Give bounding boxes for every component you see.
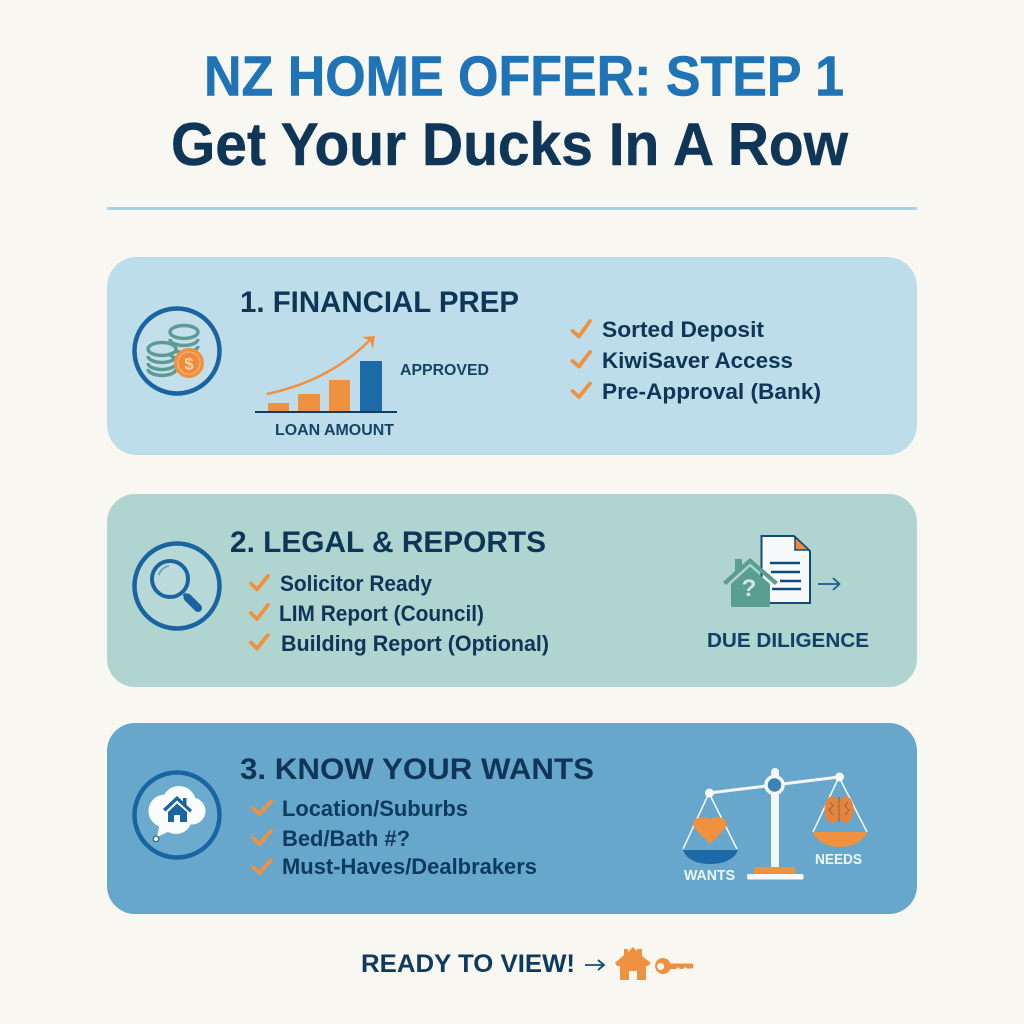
- panel: legal and reports: [107, 494, 917, 687]
- heart: [693, 817, 727, 844]
- icon: coins: [134, 308, 220, 394]
- checklist: financial prep: KiwiSaver Access: [602, 348, 793, 373]
- checklist: know your wants: Bed/Bath #?: [282, 826, 410, 851]
- label: needs: NEEDS: [815, 852, 862, 868]
- icon: key: [655, 958, 694, 974]
- title line 1: NZ HOME OFFER: STEP 1: [204, 44, 844, 108]
- chart: loan amount bars: [255, 336, 397, 439]
- checklist: know your wants: Must-Haves/Dealbrakers: [282, 854, 537, 879]
- heading: financial prep: 1. FINANCIAL PREP: [240, 286, 519, 319]
- checklist: legal and reports: Solicitor Ready: [280, 571, 433, 596]
- heading: know your wants: 3. KNOW YOUR WANTS: [240, 753, 594, 786]
- checklist: legal and reports: LIM Report (Council): [279, 601, 484, 626]
- checklist: know your wants: [253, 796, 537, 879]
- label: wants: WANTS: [684, 868, 735, 884]
- label: due diligence: DUE DILIGENCE: [707, 630, 869, 652]
- checklist: know your wants: Location/Suburbs: [282, 796, 468, 821]
- title line 2: Get Your Ducks In A Row: [171, 111, 848, 178]
- footer: ready to view: [361, 947, 694, 980]
- panel: financial prep: [107, 257, 917, 455]
- brain: [824, 796, 854, 823]
- checklist: financial prep: Pre-Approval (Bank): [602, 379, 821, 404]
- icon: coins: $: [184, 354, 194, 374]
- footer: ready to view: READY TO VIEW!: [361, 950, 575, 978]
- icon: balance scale: [683, 768, 867, 884]
- checklist: legal and reports: Building Report (Optional): [281, 631, 549, 656]
- chart label: loan amount: LOAN AMOUNT: [275, 422, 395, 439]
- arrow: [585, 960, 604, 970]
- panel: know your wants: [107, 723, 917, 914]
- checklist: financial prep: Sorted Deposit: [602, 317, 765, 342]
- icon: house: [615, 947, 651, 980]
- title: [171, 44, 848, 178]
- checklist: legal and reports: [251, 571, 549, 656]
- icon: magnifying glass: [134, 544, 220, 628]
- arrow: [818, 578, 840, 590]
- icon: house and document: ?: [742, 575, 756, 602]
- chart label: approved: APPROVED: [400, 362, 489, 379]
- heading: legal and reports: 2. LEGAL & REPORTS: [230, 526, 546, 559]
- icon: thought bubble house: [134, 772, 220, 858]
- checklist: financial prep: [572, 317, 821, 404]
- icon: house and document: [723, 536, 840, 607]
